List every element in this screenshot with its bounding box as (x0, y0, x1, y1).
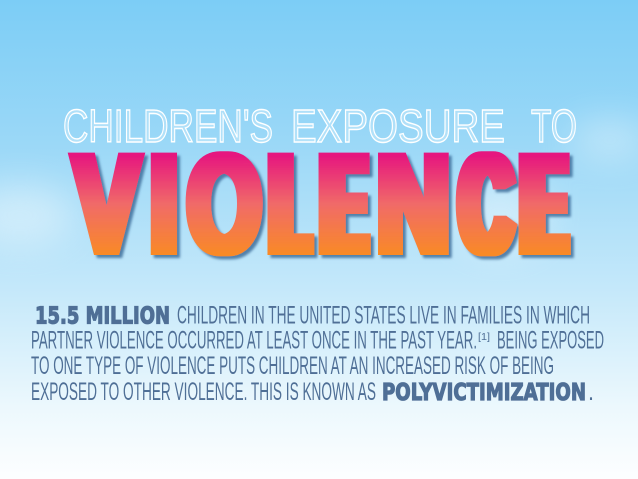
title: VIOLENCE: O (188, 125, 261, 282)
title: VIOLENCE: I (150, 125, 178, 282)
title: VIOLENCE: L (273, 125, 307, 282)
body text: [1] (478, 332, 490, 343)
body text: . (588, 378, 594, 406)
title: VIOLENCE: E (324, 125, 364, 282)
body text: POLYVICTIMIZATION (382, 380, 586, 406)
title: VIOLENCE: V (74, 125, 139, 282)
title: VIOLENCE (74, 125, 564, 282)
subtitle: CHILDREN'S (63, 100, 273, 152)
body text: 15.5 MILLION (35, 304, 170, 330)
infographic slide: E (524, 125, 564, 282)
title: VIOLENCE: N (378, 125, 449, 282)
subtitle: EXPOSURE (291, 100, 505, 152)
body text (31, 302, 604, 406)
subtitle (63, 100, 577, 152)
subtitle: TO (531, 100, 577, 152)
title: VIOLENCE: C (460, 125, 512, 282)
clouds (0, 122, 638, 250)
